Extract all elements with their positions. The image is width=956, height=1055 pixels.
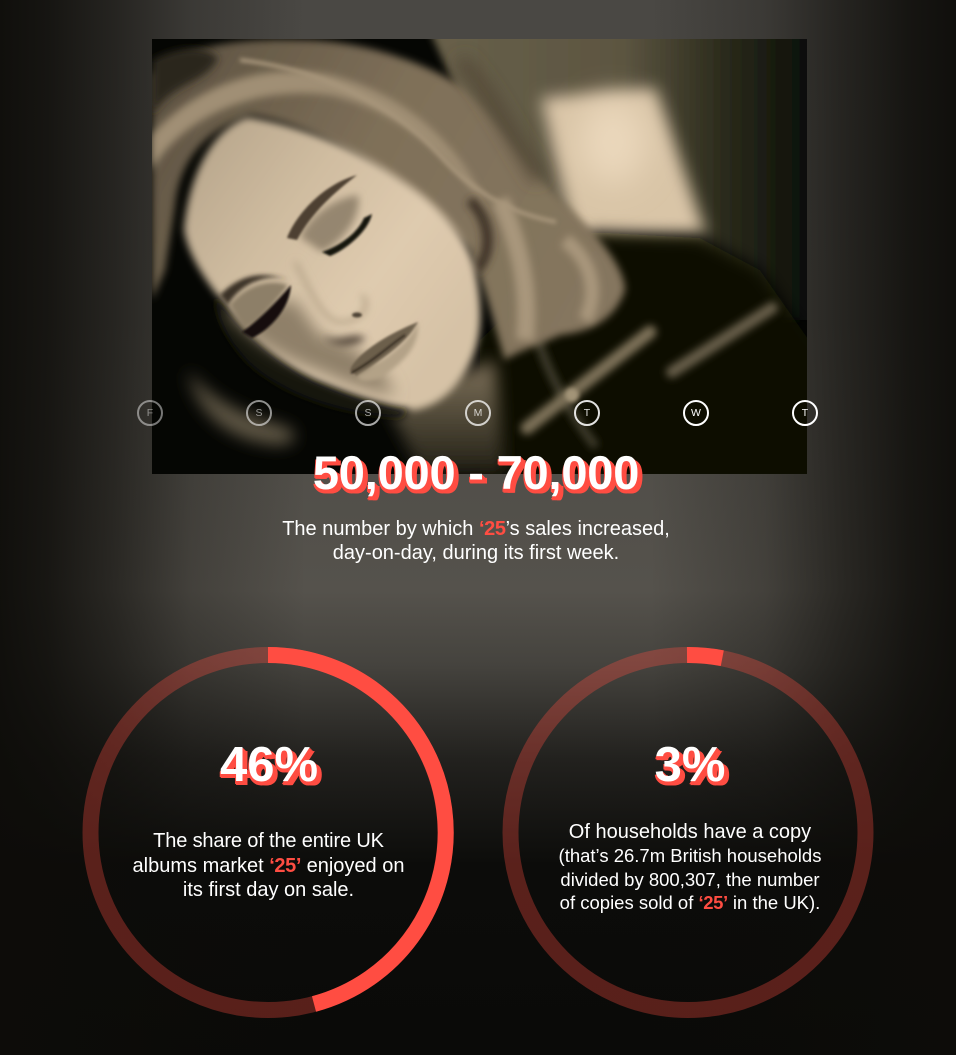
day: Tuesday: T xyxy=(584,407,590,419)
description: 46%: its first day on sale. xyxy=(183,879,354,901)
description: 3%: divided by 800,307, the number xyxy=(560,869,820,890)
description: 3%: Of households have a copy xyxy=(569,821,811,843)
description: 3% xyxy=(559,821,821,913)
day: Monday xyxy=(465,400,491,426)
description: 3%: of copies sold of ‘25’ in the UK). xyxy=(560,892,820,913)
day: Thursday: T xyxy=(802,407,808,419)
headline number: 50,000 - 70,000 xyxy=(313,446,639,499)
hair xyxy=(152,40,625,360)
day: Friday: F xyxy=(147,407,153,419)
headline description: day-on-day, during its first week. xyxy=(333,542,619,564)
description: 46%: The share of the entire UK xyxy=(153,830,384,852)
day: Friday xyxy=(137,400,163,426)
braids xyxy=(527,308,772,447)
headline description: The number by which ‘25’s sales increased, xyxy=(282,518,670,540)
description: 3%: (that’s 26.7m British households xyxy=(559,845,821,866)
stat: 3%: 3% xyxy=(655,738,725,792)
day: Sunday xyxy=(355,400,381,426)
day: Saturday: S xyxy=(255,407,262,419)
description: 46%: albums market ‘25’ enjoyed on xyxy=(133,854,404,876)
face xyxy=(184,117,480,418)
lower hair and neck xyxy=(188,360,505,474)
day markers: F S S M T W T xyxy=(137,400,818,426)
day: Wednesday xyxy=(683,400,709,426)
day: Monday: M xyxy=(474,407,482,419)
photo: singer portrait xyxy=(152,39,807,474)
description: 46% xyxy=(133,830,404,901)
day: Wednesday: W xyxy=(691,407,701,419)
day: Tuesday xyxy=(574,400,600,426)
jacket xyxy=(586,219,798,325)
headline description xyxy=(282,518,670,564)
day: Sunday: S xyxy=(364,407,372,419)
room backdrop xyxy=(428,39,807,320)
day: Thursday xyxy=(792,400,818,426)
day: Saturday xyxy=(246,400,272,426)
stat: 46%: 46% xyxy=(220,738,318,792)
